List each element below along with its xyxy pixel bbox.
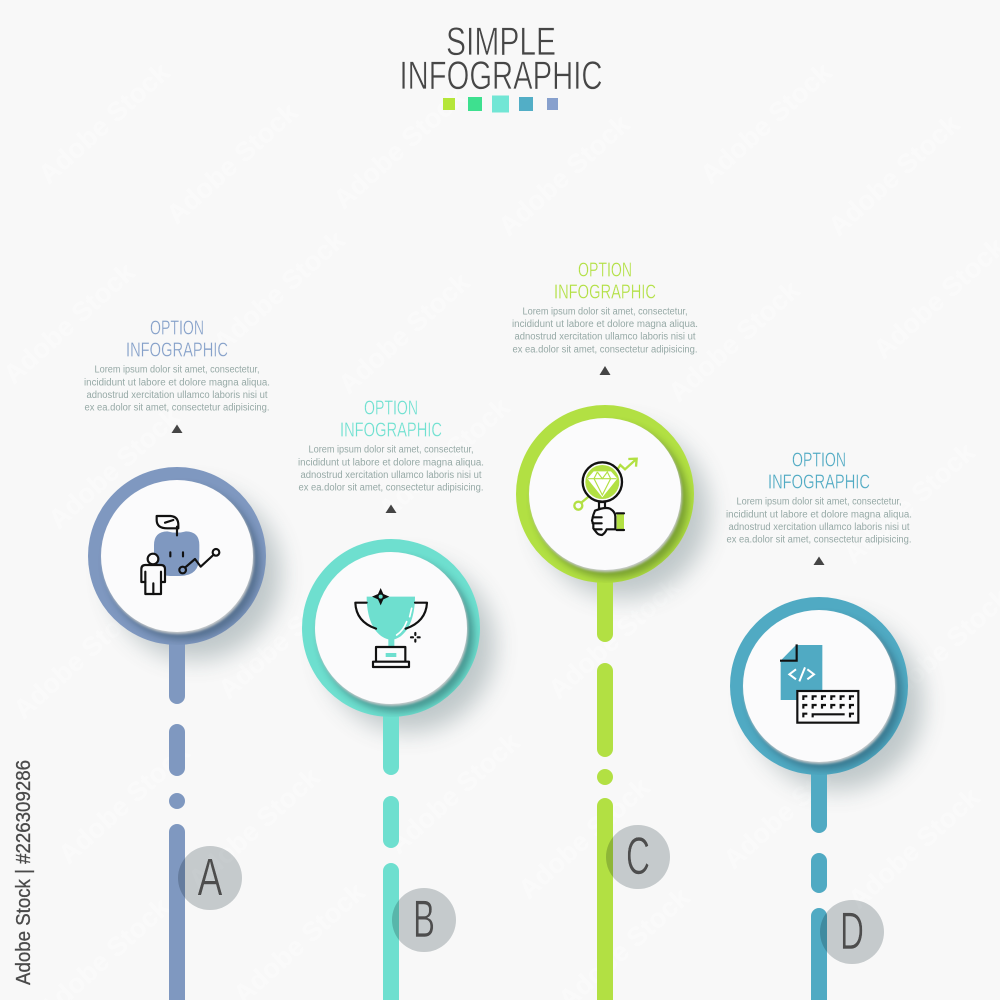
badge D (820, 900, 884, 964)
text block D (726, 497, 912, 546)
text block A: incididunt ut labore et dolore magna aliqua. (84, 377, 270, 388)
arrow D (814, 556, 824, 565)
arrow A (172, 424, 182, 433)
text: Adobe Stock (183, 761, 326, 895)
heading B (340, 396, 442, 442)
text block B (298, 445, 484, 494)
text block D: adnostrud xercitation ullamco laboris nisi ut (728, 522, 910, 533)
dashed line A (109, 488, 281, 1000)
text: Adobe Stock (838, 436, 981, 570)
heading C: OPTION (578, 258, 632, 281)
heading D: INFOGRAPHIC (768, 471, 870, 494)
badge B (392, 888, 456, 952)
text: Adobe Stock (823, 108, 966, 242)
arrow B (386, 504, 396, 513)
text: Adobe Stock (718, 741, 861, 875)
title (400, 20, 602, 98)
badge D: D (840, 902, 864, 961)
dashed line C (537, 426, 709, 1000)
panel: option A (84, 316, 281, 1000)
text block A (84, 365, 270, 414)
panel: option C (512, 258, 709, 1000)
heading A (126, 316, 228, 362)
text: Adobe Stock (208, 224, 351, 358)
dashed line D (751, 618, 923, 1000)
text: Adobe Stock (333, 266, 476, 400)
heading A: OPTION (150, 316, 204, 340)
heading D (768, 448, 870, 494)
heading A: INFOGRAPHIC (126, 339, 228, 362)
text block C (512, 306, 698, 355)
text: Adobe Stock (695, 56, 838, 190)
text block A: ex ea.dolor sit amet, consectetur adipisicing. (84, 403, 270, 414)
text block C: adnostrud xercitation ullamco laboris nisi ut (514, 332, 696, 343)
icon: code file and keyboard (780, 644, 858, 723)
text block C: Lorem ipsum dolor sit amet, consectetur, (522, 306, 688, 317)
text block D: ex ea.dolor sit amet, consectetur adipisicing. (726, 535, 912, 546)
text: Adobe Stock (543, 571, 686, 705)
panel: option B (298, 396, 495, 1000)
text block D: incididunt ut labore et dolore magna aliqua. (726, 509, 912, 520)
text: Adobe Stock (373, 391, 516, 525)
text: Adobe Stock (383, 726, 526, 860)
ring C (516, 405, 694, 583)
text: Adobe Stock (663, 274, 806, 408)
title: INFOGRAPHIC (400, 54, 602, 98)
text: Adobe Stock (53, 736, 196, 870)
badge B: B (413, 890, 435, 949)
text block D: Lorem ipsum dolor sit amet, consectetur, (736, 497, 902, 508)
text: Adobe Stock (8, 591, 151, 725)
badge A (178, 846, 242, 910)
text: Adobe Stock (513, 771, 656, 905)
text block B: adnostrud xercitation ullamco laboris nisi ut (300, 470, 482, 481)
text: Adobe Stock (161, 96, 304, 230)
dashed line B (323, 560, 495, 1000)
text block B: ex ea.dolor sit amet, consectetur adipisicing. (298, 483, 484, 494)
text: Adobe Stock (213, 571, 356, 705)
ring B (302, 539, 480, 717)
badge C (606, 825, 670, 889)
text: Adobe Stock (43, 401, 186, 535)
icon: diamond under magnifier held by hand (574, 459, 637, 535)
heading D: OPTION (792, 448, 846, 472)
badge C: C (626, 827, 650, 886)
arrow C (600, 366, 610, 375)
text: Adobe Stock (328, 81, 471, 215)
heading B: OPTION (364, 396, 418, 420)
side credit: Adobe Stock | #226309286 (13, 760, 35, 985)
text block B: Lorem ipsum dolor sit amet, consectetur, (308, 445, 474, 456)
text: Adobe Stock (33, 56, 176, 190)
icon: apple, person and chart (141, 516, 219, 594)
text: Adobe Stock (843, 781, 986, 915)
text block C: ex ea.dolor sit amet, consectetur adipisicing. (512, 344, 698, 355)
colour squares (443, 96, 558, 112)
text block A: adnostrud xercitation ullamco laboris nisi ut (86, 390, 268, 401)
icon: trophy (355, 588, 427, 667)
heading C: INFOGRAPHIC (554, 280, 656, 304)
text block A: Lorem ipsum dolor sit amet, consectetur, (94, 365, 260, 376)
text block B: incididunt ut labore et dolore magna aliqua. (298, 457, 484, 468)
panel: option D (726, 448, 923, 1000)
ring A (88, 467, 266, 645)
heading C (554, 258, 656, 304)
title: SIMPLE (446, 20, 556, 64)
text: Adobe Stock (0, 256, 141, 390)
heading B: INFOGRAPHIC (340, 419, 442, 442)
badge A: A (198, 848, 223, 907)
ring D (730, 597, 908, 775)
text block C: incididunt ut labore et dolore magna aliqua. (512, 319, 698, 330)
text: Adobe Stock (493, 108, 636, 242)
